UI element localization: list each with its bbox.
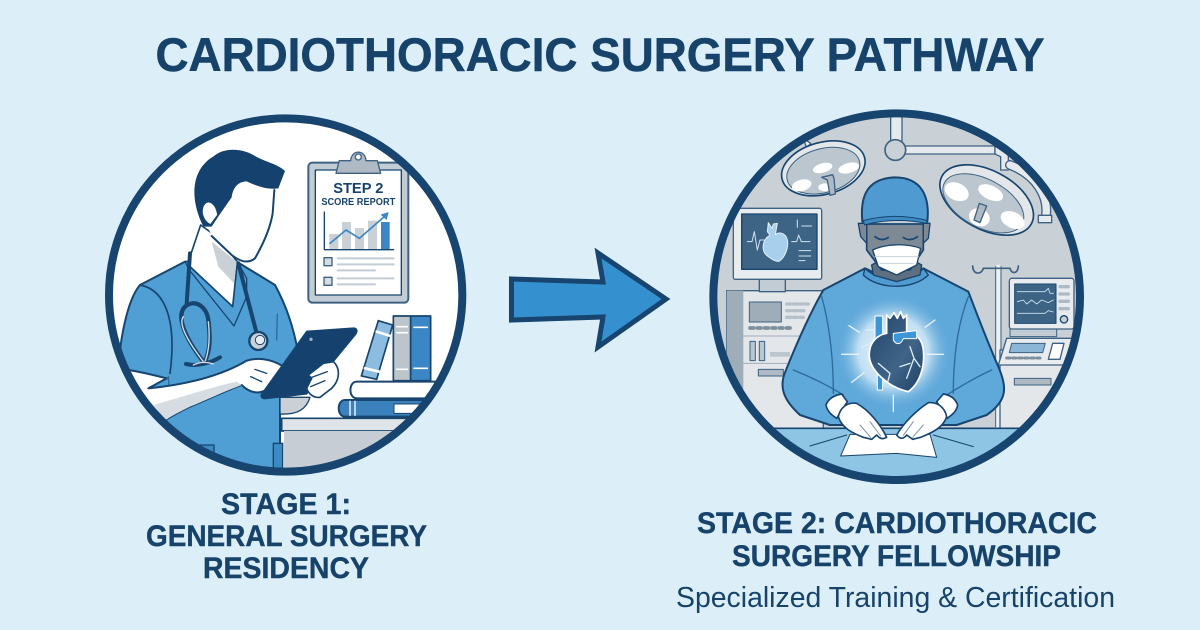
hair: [194, 150, 285, 227]
icon: clipboard score report: [308, 152, 408, 303]
heading: stage 1: STAGE 1:: [221, 488, 351, 521]
heading: stage 2: SURGERY FELLOWSHIP: [732, 540, 1061, 573]
arrow: [512, 253, 666, 347]
heading: stage 1: [146, 488, 427, 585]
icon: surgeon: [782, 177, 1004, 425]
icon: clipboard score report: STEP 2: [333, 181, 383, 197]
icon: doctor: [120, 150, 357, 477]
title: CARDIOTHORACIC SURGERY PATHWAY: [156, 28, 1044, 81]
heading: stage 2: [697, 507, 1097, 573]
icon: surgical light left: [780, 140, 866, 197]
panel: stage 2 illustration: [710, 110, 1083, 493]
gown: [782, 268, 1004, 425]
icon: desk: [281, 418, 408, 468]
neck and head: [871, 262, 922, 282]
icon: right monitor and machine: [998, 278, 1080, 430]
icon: gloved hands: [826, 394, 958, 439]
collar: [185, 262, 247, 326]
panel: stage 1 illustration: [109, 118, 462, 481]
scrub top: [120, 262, 298, 477]
icon: books: [339, 316, 437, 417]
icon: left monitor and machine: [727, 208, 823, 431]
icon: clipboard score report: SCORE REPORT: [321, 197, 395, 208]
arm and hands: [128, 359, 283, 421]
stethoscope: [187, 253, 257, 333]
heading: stage 1: GENERAL SURGERY: [146, 520, 427, 553]
cap: [862, 177, 928, 222]
icon: table and drape: [774, 428, 1020, 476]
heading: stage 2: STAGE 2: CARDIOTHORACIC: [697, 507, 1097, 540]
icon: iv pole: [973, 266, 1018, 427]
icon: glowing heart: [841, 300, 944, 412]
neck and face: [190, 225, 237, 307]
heading: stage 1: RESIDENCY: [203, 552, 369, 585]
icon: surgical light right: [939, 160, 1052, 236]
mask: [873, 245, 921, 275]
icon: ceiling arm: [885, 110, 1008, 170]
tablet: [261, 328, 357, 399]
subtitle: specialized training: Specialized Training & Certification: [676, 582, 1115, 614]
